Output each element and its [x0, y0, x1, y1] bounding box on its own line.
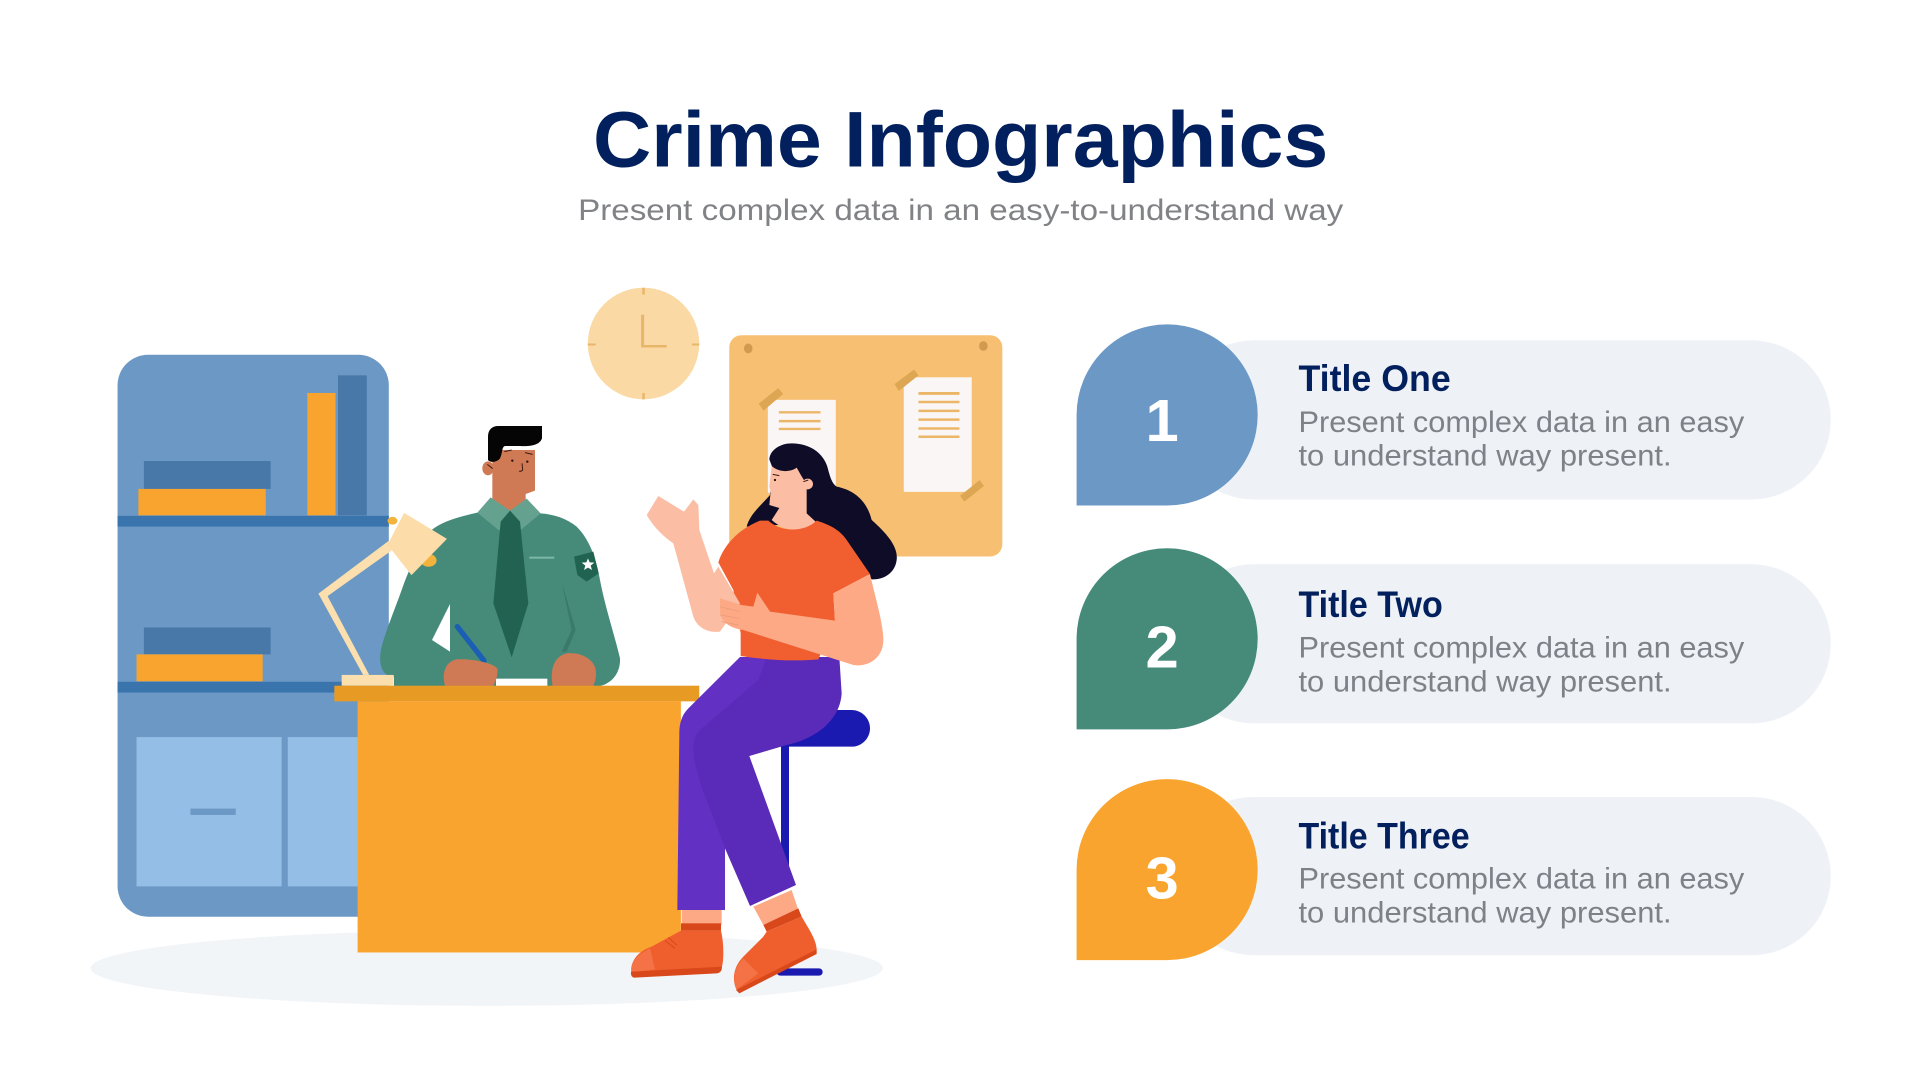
item three number: 3	[1146, 844, 1179, 911]
desk	[334, 686, 699, 952]
item one text: Present complex data in an easy	[1298, 406, 1744, 439]
officer ear	[482, 461, 494, 475]
item two badge	[1077, 548, 1258, 729]
trousers	[677, 657, 842, 910]
desk and lamp	[318, 513, 699, 952]
folded arm	[720, 574, 883, 665]
officer left hand	[444, 659, 498, 686]
panel: item one	[1077, 324, 1831, 505]
item two text: to understand way present.	[1298, 666, 1672, 699]
item three text: Present complex data in an easy	[1298, 863, 1744, 896]
item one pill	[1174, 340, 1831, 499]
desk lamp	[318, 513, 447, 686]
item three text	[1298, 863, 1744, 929]
raised arm	[647, 496, 740, 632]
item three pill	[1174, 797, 1831, 955]
item two text: Present complex data in an easy	[1298, 632, 1744, 665]
collar	[477, 497, 541, 531]
notice board	[729, 335, 1002, 556]
floor shadow	[91, 930, 883, 1006]
pen	[457, 627, 484, 661]
woman lower body and stool	[631, 657, 870, 993]
item three badge	[1077, 779, 1258, 960]
item one badge	[1077, 324, 1258, 505]
shoulder patch	[574, 552, 599, 582]
item one heading: Title One	[1298, 358, 1451, 399]
illustration: police officer interviewing a woman at a desk	[91, 288, 1002, 1006]
stool	[777, 710, 870, 976]
officer face details	[487, 450, 533, 471]
front shoe	[734, 908, 817, 993]
officer right hand	[552, 653, 596, 686]
paper on desk	[496, 679, 547, 686]
officer shirt	[380, 513, 620, 686]
panel: item two	[1077, 548, 1831, 729]
woman face and neck	[769, 466, 817, 530]
officer head and neck	[492, 450, 535, 517]
shirt	[718, 521, 870, 660]
item one text	[1298, 406, 1744, 473]
item two text	[1298, 632, 1744, 699]
finger lines	[720, 607, 740, 625]
police officer	[380, 426, 620, 686]
ankles	[682, 890, 798, 925]
item three text: to understand way present.	[1298, 896, 1672, 929]
item two pill	[1174, 564, 1831, 723]
panel: item three	[1077, 779, 1831, 960]
shirt pocket	[529, 557, 554, 559]
subtitle: Present complex data in an easy-to-understand way	[578, 194, 1343, 227]
back shoe	[631, 923, 723, 978]
wall clock	[588, 288, 699, 399]
item two heading: Title Two	[1298, 584, 1443, 625]
item one number: 1	[1146, 387, 1179, 454]
item two number: 2	[1146, 614, 1179, 681]
woman hair	[747, 443, 897, 579]
officer hair	[488, 426, 542, 462]
item one text: to understand way present.	[1298, 440, 1672, 473]
woman ear	[802, 479, 813, 489]
woman face details	[773, 474, 808, 482]
room background: floor, bookcase, clock, board	[91, 288, 1002, 1006]
tie	[493, 511, 528, 657]
woman upper body	[647, 443, 897, 665]
bookcase	[118, 355, 389, 917]
item three heading: Title Three	[1298, 816, 1470, 857]
title: Crime Infographics	[593, 96, 1328, 184]
